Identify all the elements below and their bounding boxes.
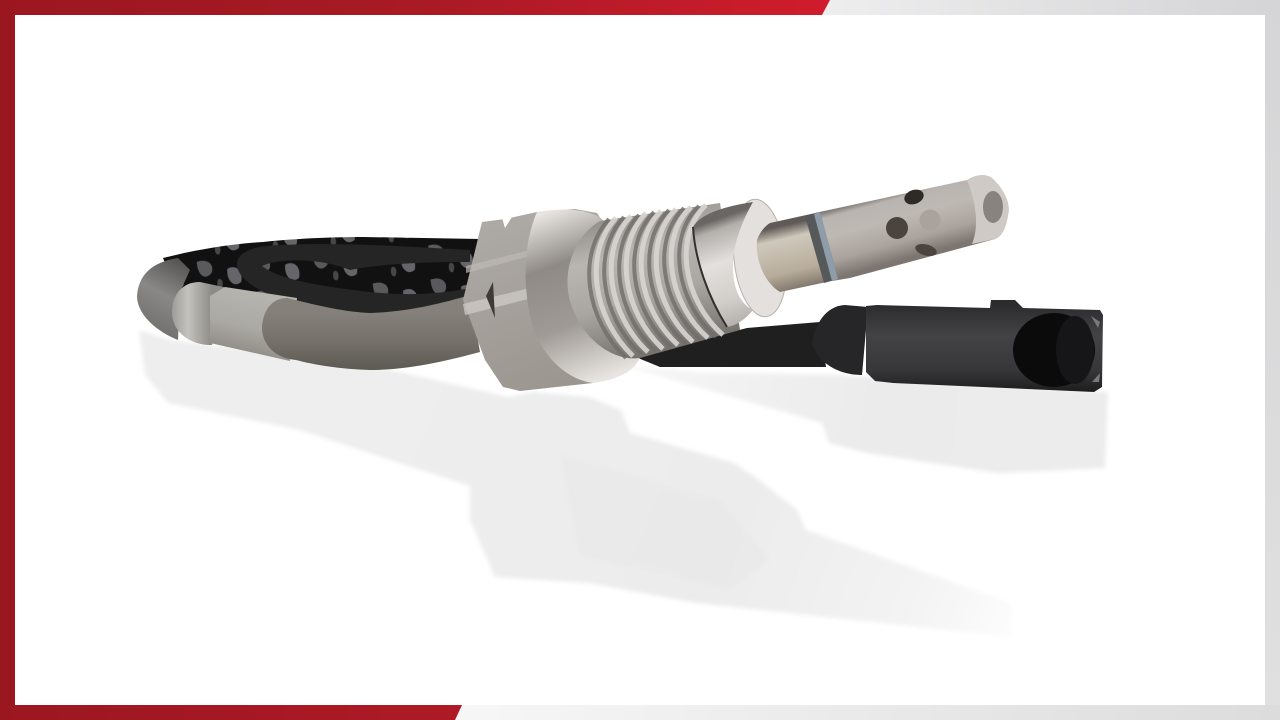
sensor product photo illustration bbox=[137, 175, 1103, 392]
frame: grey bottom bar bbox=[450, 705, 1280, 720]
connector socket bbox=[1013, 313, 1095, 387]
probe heat ring bbox=[805, 212, 838, 283]
frame: red bottom bar bbox=[0, 705, 462, 720]
collar cylinder bbox=[693, 202, 753, 327]
frame: red left bar bbox=[0, 0, 15, 720]
connector boot bbox=[812, 305, 868, 375]
probe vent holes bbox=[886, 187, 940, 258]
probe tip recess bbox=[983, 191, 1003, 223]
reflected connector bbox=[625, 366, 1108, 473]
connector socket partition bbox=[1056, 316, 1094, 384]
black thin cable bbox=[638, 322, 826, 367]
nut arrow mark bbox=[486, 282, 495, 318]
reflected cable, nut, thread and probe bbox=[139, 330, 1011, 637]
hex nut bbox=[463, 209, 623, 391]
probe tube bbox=[815, 175, 1009, 281]
thread ridges light bbox=[596, 205, 723, 356]
nut ridge highlight bbox=[466, 250, 530, 273]
nut arrow highlight bbox=[463, 288, 532, 315]
threaded body bbox=[567, 203, 740, 358]
probe heat ring blue band bbox=[814, 212, 838, 281]
frame: grey right bar bbox=[1265, 0, 1280, 720]
bent grey tube bbox=[262, 295, 480, 370]
metal sleeve bbox=[210, 287, 297, 361]
nut notch bbox=[502, 217, 512, 228]
flange disc bbox=[526, 210, 640, 383]
connector corner vents bbox=[1091, 316, 1100, 382]
probe neck bbox=[757, 212, 836, 292]
probe tip cap bbox=[967, 175, 1009, 244]
reflection of sensor on white surface bbox=[139, 330, 1108, 637]
collar dark seam bbox=[693, 227, 727, 327]
reflected thread shading bbox=[560, 455, 770, 590]
connector body bbox=[866, 300, 1103, 392]
collar disc bbox=[728, 197, 792, 319]
thread ridges dark bbox=[589, 206, 716, 358]
braided cable loop bbox=[163, 237, 480, 328]
frame: red top bar bbox=[0, 0, 830, 15]
metal ferrule bbox=[172, 282, 228, 345]
cable bend tip bbox=[137, 258, 190, 340]
frame: grey top bar bbox=[820, 0, 1280, 15]
